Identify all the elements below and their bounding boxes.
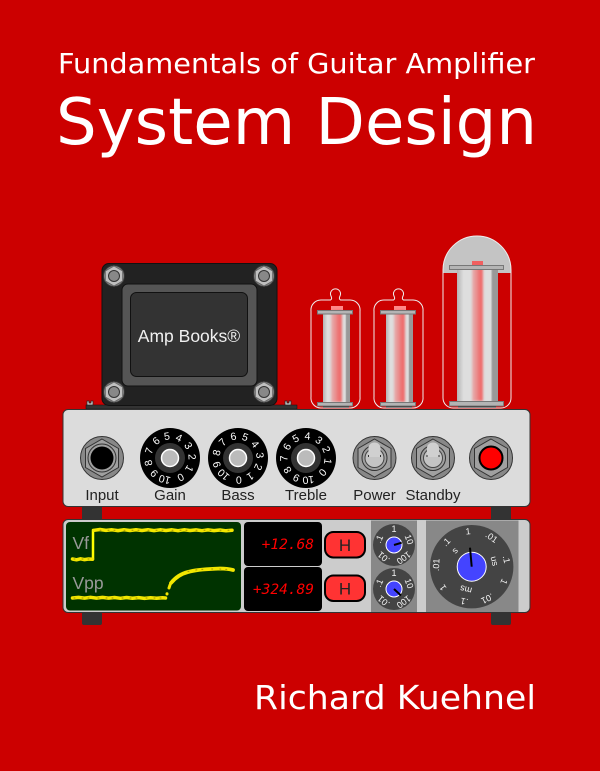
- timebase knob: .1: [440, 536, 452, 548]
- treble knob: 8: [281, 464, 295, 475]
- gain knob: 8: [143, 458, 156, 467]
- vertical scale knob 1: .1: [373, 534, 385, 544]
- treble knob: 3: [313, 434, 325, 447]
- input jack: [80, 436, 124, 480]
- bass knob: 0: [235, 473, 242, 486]
- bass knob: 6: [229, 430, 238, 443]
- timebase knob: .1: [501, 555, 512, 564]
- hold button Vpp: H: [339, 580, 351, 598]
- numeric display Vpp: +324.89: [253, 582, 314, 598]
- vertical scale knob 2: 10: [403, 577, 415, 590]
- bolt bottom left: [104, 382, 124, 402]
- author name: Richard Kuehnel: [254, 678, 536, 717]
- preamp tube 1: [311, 289, 360, 408]
- title: subtitle line: Fundamentals of Guitar Amplifier: [58, 48, 536, 80]
- treble label: Treble: [285, 487, 327, 504]
- timebase knob: 1: [498, 577, 509, 586]
- timebase knob: [430, 525, 513, 608]
- preamp tube 2: [374, 289, 423, 408]
- timebase knob: us: [488, 555, 501, 567]
- hold button Vf: H: [339, 536, 351, 555]
- gain knob: 1: [182, 463, 195, 474]
- trace Vf: [72, 530, 232, 560]
- input label: Input: [85, 487, 120, 504]
- bass knob: 10: [215, 466, 232, 483]
- timebase knob: ms: [459, 583, 473, 596]
- timebase knob: s: [450, 545, 460, 555]
- bass label: Bass: [221, 487, 255, 504]
- vertical scale knob 2: 1: [391, 568, 397, 578]
- numeric display Vpp: [244, 567, 322, 611]
- scope label Vf: Vf: [72, 533, 89, 553]
- bass knob: 7: [217, 436, 229, 449]
- vertical scale knob 1: [373, 524, 415, 566]
- panel: oscilloscope unit: [63, 520, 530, 612]
- red pilot lamp: [470, 436, 512, 480]
- bolt top left: [104, 266, 124, 286]
- gain knob: 0: [175, 470, 186, 484]
- timebase knob: .01: [479, 591, 495, 606]
- scope screen: [66, 522, 241, 610]
- numeric display Vf: +12.68: [262, 537, 314, 553]
- bass knob: 4: [248, 438, 261, 451]
- gain knob: 9: [148, 467, 161, 479]
- hold button Vf: [325, 532, 365, 558]
- hold button Vpp: [325, 576, 365, 601]
- power tube: [443, 236, 511, 408]
- upper chassis feet: [82, 505, 511, 519]
- gain knob: 2: [185, 454, 198, 460]
- bolt top right: [254, 266, 274, 286]
- vertical scale knob 2: .01: [376, 593, 392, 609]
- treble knob: 10: [302, 473, 315, 486]
- bass knob: 9: [211, 460, 224, 469]
- power label: Power: [353, 487, 396, 504]
- vertical scale knob 2: .1: [373, 578, 385, 588]
- gain knob: 4: [174, 432, 184, 445]
- trace Vpp: [72, 568, 233, 598]
- vertical scale knob 1: 100: [395, 549, 413, 566]
- gain knob: 10: [158, 472, 172, 486]
- treble knob: 4: [304, 430, 311, 443]
- gain knob: 3: [181, 440, 195, 452]
- timebase section: [426, 520, 518, 612]
- scope label Vpp: Vpp: [72, 573, 104, 593]
- bass knob: 1: [244, 469, 256, 483]
- timebase knob: .01: [431, 558, 442, 571]
- bolt bottom right: [254, 382, 274, 402]
- bass knob: 2: [251, 462, 264, 472]
- treble knob: [276, 428, 336, 488]
- standby label: Standby: [405, 487, 461, 504]
- transformer: [86, 264, 297, 409]
- treble knob: 9: [291, 471, 302, 484]
- title: System Design: System Design: [56, 86, 537, 160]
- gain knob: 6: [150, 435, 163, 448]
- treble knob: 7: [278, 455, 291, 461]
- power toggle switch: [353, 436, 396, 480]
- treble knob: 6: [281, 441, 294, 453]
- gain knob: 7: [143, 446, 156, 456]
- gain label: Gain: [154, 487, 186, 504]
- bass knob: 8: [211, 448, 224, 457]
- bass knob: [208, 428, 268, 488]
- numeric display Vf: [244, 522, 322, 566]
- vertical scale knob 1: 1: [391, 524, 397, 534]
- standby toggle switch: [412, 436, 454, 480]
- timebase knob: 1: [465, 526, 471, 537]
- bass knob: 5: [240, 431, 250, 444]
- vertical scale knob 2: [373, 568, 415, 610]
- vertical scale section: [371, 520, 417, 612]
- transformer label: Amp Books®: [138, 326, 240, 346]
- gain knob: [140, 428, 200, 488]
- vertical scale knob 1: 10: [403, 533, 415, 546]
- treble knob: 2: [319, 445, 333, 455]
- treble knob: 0: [316, 466, 329, 478]
- lower chassis feet: [82, 612, 511, 625]
- timebase knob: .01: [484, 530, 500, 545]
- bass knob: 3: [253, 452, 266, 459]
- panel: amplifier control panel: [63, 410, 530, 506]
- timebase knob: 1: [437, 583, 448, 593]
- treble knob: 1: [321, 458, 334, 465]
- vertical scale knob 2: 100: [395, 593, 413, 610]
- timebase knob: .1: [460, 596, 469, 607]
- vertical scale knob 1: .01: [376, 549, 392, 565]
- treble knob: 5: [291, 432, 301, 446]
- gain knob: 5: [163, 430, 171, 443]
